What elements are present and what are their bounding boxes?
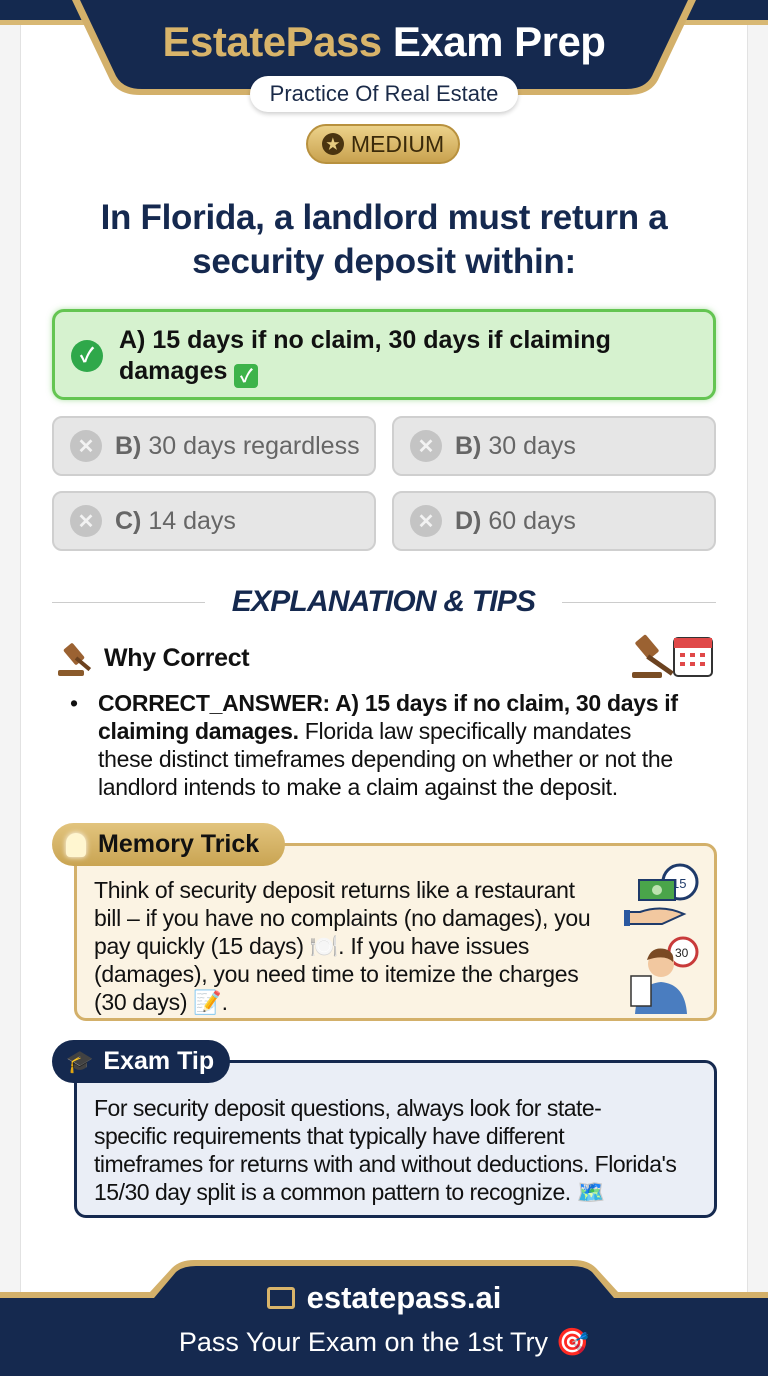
memory text: (30 days) 📝. (94, 989, 228, 1015)
subtitle pill (250, 76, 518, 112)
explanation text: these distinct timeframes depending on whether or not the (98, 746, 673, 772)
difficulty badge (306, 124, 460, 164)
icon: money stopwatch hand (624, 864, 698, 926)
explanation text: CORRECT_ANSWER: A) 15 days if no claim, 30 days if (98, 690, 678, 716)
panel: exam tip (74, 1060, 717, 1218)
option B1: ✕ (78, 436, 94, 458)
icon: star badge (322, 133, 344, 155)
tab: exam tip: Exam Tip (103, 1047, 214, 1075)
icon: check: ✓ (80, 345, 94, 367)
exam tip text: specific requirements that typically have different (94, 1123, 564, 1149)
footer site: estatepass.ai (307, 1280, 501, 1315)
panel: memory trick (74, 843, 717, 1021)
tab: memory trick (52, 823, 285, 866)
memory text (94, 877, 590, 1015)
option B1 (52, 416, 376, 476)
exam tip text (94, 1095, 676, 1205)
why correct: • (70, 690, 78, 716)
question: In Florida, a landlord must return a (101, 198, 667, 237)
option A correct (52, 309, 716, 400)
why correct (58, 634, 713, 800)
icon: graduation cap: 🎓 (66, 1048, 93, 1074)
option C (52, 491, 376, 551)
section heading: EXPLANATION & TIPS (232, 585, 535, 618)
icon: person with bill: 30 (675, 946, 689, 960)
option A correct: damages (119, 357, 227, 385)
option B1: B) 30 days regardless (115, 432, 360, 460)
subtitle pill: Practice Of Real Estate (270, 81, 498, 106)
option D: ✕ (418, 510, 434, 532)
icon: check (71, 340, 103, 372)
exam tip text: timeframes for returns with and without deductions. Florida's (94, 1151, 676, 1177)
icon: gavel and calendar (632, 634, 713, 678)
icon: gavel (58, 643, 91, 676)
option A correct: A) 15 days if no claim, 30 days if claiming (119, 326, 611, 354)
exam tip text: For security deposit questions, always look for state- (94, 1095, 601, 1121)
tab: memory trick: Memory Trick (98, 830, 259, 858)
option B2: B) 30 days (455, 432, 576, 460)
icon: lightbulb (66, 832, 86, 856)
explanation text (70, 690, 678, 800)
option B2: ✕ (418, 436, 434, 458)
icon: person with bill (630, 936, 698, 1014)
tab: exam tip (52, 1040, 230, 1083)
heading: Why Correct (104, 644, 249, 672)
memory text: bill – if you have no complaints (no damages), you (94, 905, 590, 931)
icon: star badge: ★ (326, 136, 340, 152)
option D (392, 491, 716, 551)
option C: ✕ (78, 510, 94, 532)
explanation text: landlord intends to make a claim against the deposit. (98, 774, 618, 800)
footer banner (0, 1260, 768, 1376)
option D: D) 60 days (455, 506, 576, 534)
title: EstatePass Exam Prep (163, 18, 605, 65)
question: security deposit within: (192, 242, 576, 281)
explanation text: claiming damages. Florida law specifically mandates (98, 718, 631, 744)
memory text: Think of security deposit returns like a restaurant (94, 877, 575, 903)
exam tip text: 15/30 day split is a common pattern to recognize. 🗺️ (94, 1179, 605, 1205)
difficulty badge: MEDIUM (351, 130, 444, 156)
memory text: pay quickly (15 days) 🍽️. If you have issues (94, 933, 529, 959)
question (101, 198, 668, 281)
option C: C) 14 days (115, 506, 236, 534)
header banner (0, 0, 768, 95)
option B2 (392, 416, 716, 476)
option A correct: ✓ (240, 366, 253, 386)
memory text: (damages), you need time to itemize the charges (94, 961, 578, 987)
icon: money stopwatch hand: 15 (672, 876, 686, 891)
footer tagline: Pass Your Exam on the 1st Try 🎯 (179, 1327, 589, 1357)
